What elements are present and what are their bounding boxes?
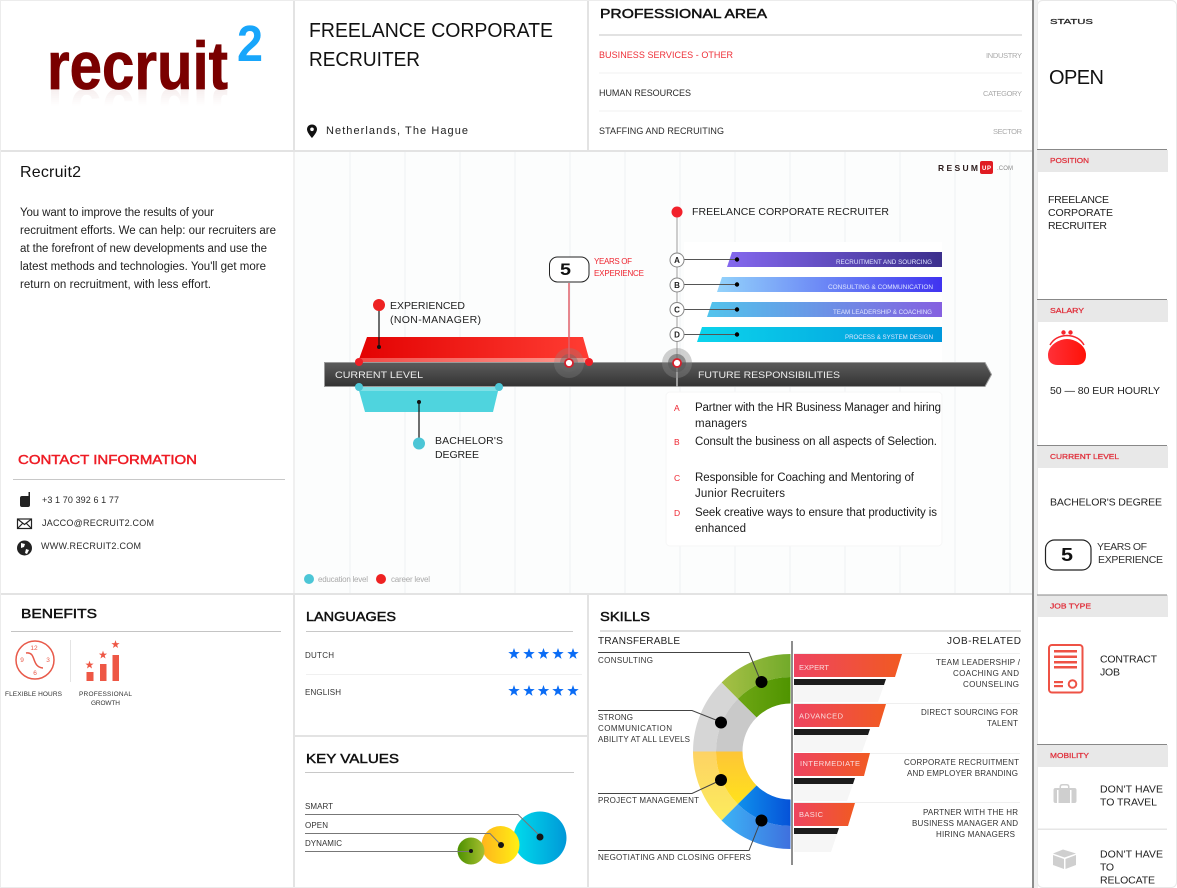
years of experience marker	[550, 257, 644, 378]
transferable skill labels: NEGOTIATING AND CLOSING OFFERS	[598, 853, 751, 862]
icon: contract document	[1049, 645, 1082, 692]
teal endpoints	[355, 383, 503, 391]
language: Dutch: DUTCH	[305, 651, 334, 660]
website: WWW.RECRUIT2.COM	[41, 541, 141, 551]
chart legend	[304, 574, 430, 584]
panel: company description	[20, 164, 276, 291]
bachelor's degree marker: BACHELOR'S	[435, 435, 503, 447]
level: expert	[794, 654, 902, 702]
mobility: relocate: TO	[1100, 862, 1114, 874]
transferable skill labels	[598, 656, 751, 862]
icon: clock	[16, 641, 54, 679]
job-related skill labels: TALENT	[987, 719, 1018, 728]
salary section: 50 — 80 EUR HOURLY	[1050, 385, 1160, 397]
job-related skill labels: COUNSELING	[963, 680, 1019, 689]
location text: Netherlands, The Hague	[326, 125, 468, 137]
icon: red purse	[1048, 330, 1086, 365]
job-related skill labels: HIRING MANAGERS	[936, 830, 1015, 839]
sector row: SECTOR	[993, 127, 1023, 136]
job type section: JOB TYPE	[1050, 604, 1091, 610]
red endpoints	[355, 358, 593, 366]
future responsibilities label: FUTURE RESPONSIBILITIES	[698, 370, 840, 381]
timeline bar	[324, 362, 992, 386]
logo superscript: 2	[237, 15, 263, 72]
mobility section	[1037, 744, 1168, 886]
description text	[20, 207, 276, 291]
bar: team leadership and coaching	[670, 302, 942, 317]
labels: OPEN	[305, 821, 328, 830]
card: responsibilities list: A	[674, 403, 680, 413]
donut chart	[598, 652, 790, 850]
status: OPEN	[1049, 67, 1104, 89]
icon: clock: 12	[30, 645, 38, 652]
bar: process and system design: PROCESS & SYSTEM DESIGN	[845, 334, 933, 341]
level: expert: EXPERT	[799, 663, 829, 672]
mobility: travel: DON'T HAVE	[1100, 784, 1163, 796]
bar: consulting and communication	[670, 277, 942, 292]
bar: consulting and communication: B	[674, 281, 680, 290]
heading: KEY VALUES	[306, 751, 399, 766]
icon: location pin	[307, 124, 317, 138]
benefit: professional growth	[79, 691, 132, 707]
red current position trapezoid	[358, 337, 590, 362]
category row: CATEGORY	[983, 89, 1022, 98]
card: responsibilities list: Seek creative ways to ensure that productivity is	[695, 507, 937, 519]
panel: career chart background	[295, 152, 1033, 593]
transferable label: TRANSFERABLE	[598, 636, 680, 647]
benefit: professional growth: GROWTH	[91, 700, 120, 707]
panel: professional area	[599, 6, 1023, 136]
position section: RECRUITER	[1048, 220, 1107, 232]
job-related label: JOB-RELATED	[947, 636, 1021, 647]
job type section: CONTRACT	[1100, 654, 1158, 666]
position section: POSITION	[1050, 158, 1089, 165]
description text: You want to improve the results of your	[20, 207, 214, 219]
job-related skill labels: AND EMPLOYER BRANDING	[907, 769, 1018, 778]
teal education trapezoid	[358, 387, 499, 412]
level: basic	[794, 803, 855, 852]
labels: SMART	[305, 802, 333, 811]
phone number: +3 1 70 392 6 1 77	[42, 495, 119, 505]
panel: job title	[307, 20, 553, 138]
bar: process and system design: D	[674, 330, 680, 340]
panel: job title: RECRUITER	[309, 49, 420, 71]
labels: DYNAMIC	[305, 839, 342, 848]
status: STATUS	[1050, 17, 1093, 26]
card: responsibilities list: enhanced	[695, 523, 746, 535]
card: responsibilities list: D	[674, 508, 680, 518]
icon: suitcase	[1054, 784, 1076, 803]
panel: contact information	[13, 452, 285, 556]
Resumup brand: RESUM	[938, 163, 978, 173]
logo wordmark: recruit	[47, 28, 228, 104]
card: responsibilities list: Consult the business on all aspects of Selection.	[695, 436, 937, 448]
chart legend: education level	[318, 575, 368, 584]
icon: growth bars	[85, 640, 120, 681]
bachelor's degree marker	[413, 400, 503, 461]
language: English	[305, 685, 579, 697]
current level section: YEARS OF	[1097, 541, 1147, 553]
bar: consulting and communication: CONSULTING & COMMUNICATION	[828, 284, 933, 291]
level: intermediate	[794, 753, 870, 801]
current level section: 5	[1061, 545, 1073, 565]
benefit: flexible hours: FLEXIBLE HOURS	[5, 691, 63, 698]
heading: BENEFITS	[21, 606, 97, 621]
job-related skill labels: BUSINESS MANAGER AND	[912, 819, 1018, 828]
chart legend: career level	[391, 575, 430, 584]
description text: latest methods and technologies. You'll get more	[20, 261, 266, 273]
card: responsibilities list: managers	[695, 418, 747, 430]
heading: PROFESSIONAL AREA	[600, 6, 767, 21]
Resumup brand: .COM	[997, 166, 1013, 172]
experienced marker: (NON-MANAGER)	[390, 314, 481, 326]
bar: team leadership and coaching: C	[674, 306, 680, 314]
panel: languages	[305, 609, 582, 697]
salary section: SALARY	[1050, 308, 1084, 315]
transferable skill labels: CONSULTING	[598, 656, 653, 665]
job-related skill labels: CORPORATE RECRUITMENT	[904, 758, 1019, 767]
card: responsibilities list: Partner with the HR Business Manager and hiring	[695, 402, 941, 414]
language: English: ENGLISH	[305, 688, 341, 697]
job-related skill labels: PARTNER WITH THE HR	[923, 808, 1018, 817]
benefit: professional growth: PROFESSIONAL	[79, 691, 132, 698]
salary section	[1037, 299, 1168, 397]
years of experience marker: YEARS OF	[594, 257, 632, 266]
industry row: INDUSTRY	[986, 51, 1022, 60]
mobility: travel: TO TRAVEL	[1100, 796, 1157, 808]
transferable skill labels: COMMUNICATION	[598, 724, 672, 733]
icon: box	[1053, 850, 1076, 869]
job type section: JOB	[1100, 666, 1120, 678]
bubble chart	[305, 812, 566, 864]
panel: company logo	[40, 15, 263, 150]
experienced marker: EXPERIENCED	[390, 300, 465, 312]
card: responsibilities list: C	[674, 473, 680, 483]
company name: Recruit2	[20, 164, 81, 181]
icon: clock: 6	[33, 670, 37, 677]
panel: benefits	[5, 606, 281, 707]
years of experience marker: 5	[560, 260, 571, 279]
job title heading: FREELANCE CORPORATE	[309, 20, 553, 42]
mobility: travel	[1100, 784, 1163, 808]
position section	[1037, 149, 1168, 232]
sidebar: job summary	[1037, 17, 1168, 886]
transferable skill labels: PROJECT MANAGEMENT	[598, 796, 699, 805]
position section: CORPORATE	[1048, 207, 1113, 219]
current level section: BACHELOR'S DEGREE	[1050, 496, 1162, 508]
heading: SKILLS	[600, 609, 650, 624]
current level label: CURRENT LEVEL	[335, 370, 423, 380]
category row	[599, 88, 1022, 98]
level: advanced: ADVANCED	[799, 712, 844, 720]
description text: at the forefront of new developments and use the	[20, 243, 267, 255]
card: responsibilities list: Junior Recruiters	[695, 488, 785, 500]
labels	[305, 802, 342, 848]
job-related skill labels	[904, 658, 1021, 839]
job type section	[1037, 594, 1168, 692]
bar: recruitment and sourcing	[670, 252, 942, 267]
experienced marker	[373, 299, 481, 349]
icon: clock: 9	[20, 657, 24, 664]
card: responsibilities list	[666, 392, 942, 546]
panel: key values	[305, 751, 574, 864]
future role stem and title	[662, 206, 889, 387]
card: responsibilities list: Responsible for Coaching and Mentoring of	[695, 472, 915, 484]
position section: FREELANCE	[1048, 194, 1109, 206]
current level section	[1037, 445, 1168, 570]
bar: team leadership and coaching: TEAM LEADERSHIP & COACHING	[833, 309, 932, 316]
icon: envelope	[18, 519, 32, 528]
future role stem and title: FREELANCE CORPORATE RECRUITER	[692, 206, 889, 218]
logo wordmark reflection: recruit	[47, 74, 228, 150]
Resumup brand: UP	[982, 166, 991, 172]
icon: globe	[17, 540, 32, 556]
email: JACCO@RECRUIT2.COM	[42, 518, 154, 528]
mobility: relocate: RELOCATE	[1100, 874, 1155, 886]
current level section: EXPERIENCE	[1098, 554, 1163, 566]
sector row: STAFFING AND RECRUITING	[599, 126, 724, 136]
card: responsibilities list: B	[674, 437, 680, 447]
description text: return on recruitment, with less effort.	[20, 279, 211, 291]
mobility: relocate: DON'T HAVE	[1100, 848, 1163, 860]
Resumup brand	[938, 161, 1013, 174]
sector row	[599, 126, 1023, 136]
mobility: relocate	[1100, 848, 1163, 886]
bar: process and system design	[670, 327, 942, 342]
bar: recruitment and sourcing: RECRUITMENT AND SOURCING	[836, 259, 932, 266]
level: basic: BASIC	[799, 810, 824, 819]
bachelor's degree marker: DEGREE	[435, 449, 479, 461]
job-related skill labels: TEAM LEADERSHIP /	[936, 658, 1021, 667]
heading: CONTACT INFORMATION	[18, 452, 197, 467]
industry row: BUSINESS SERVICES - OTHER	[599, 50, 734, 60]
job-related skill labels: COACHING AND	[953, 669, 1019, 678]
status	[1049, 17, 1104, 89]
job-related skill labels: DIRECT SOURCING FOR	[921, 708, 1018, 717]
description text: recruitment efforts. We can help: our recruiters are	[20, 225, 276, 237]
icon: phone	[20, 492, 30, 507]
heading: LANGUAGES	[306, 609, 396, 624]
years of experience marker: EXPERIENCE	[594, 269, 644, 278]
panel: skills	[598, 609, 1021, 865]
level: intermediate: INTERMEDIATE	[800, 759, 860, 768]
career chart	[304, 161, 1013, 584]
language: Dutch	[305, 648, 579, 660]
industry row	[599, 50, 1022, 60]
bar: recruitment and sourcing: A	[674, 256, 680, 265]
icon: clock: 3	[46, 657, 50, 664]
transferable skill labels: STRONG	[598, 713, 633, 722]
category row: HUMAN RESOURCES	[599, 88, 691, 98]
level: advanced	[794, 704, 886, 752]
current level section: CURRENT LEVEL	[1050, 454, 1119, 461]
transferable skill labels: ABILITY AT ALL LEVELS	[598, 735, 690, 744]
mobility section: MOBILITY	[1050, 753, 1089, 760]
